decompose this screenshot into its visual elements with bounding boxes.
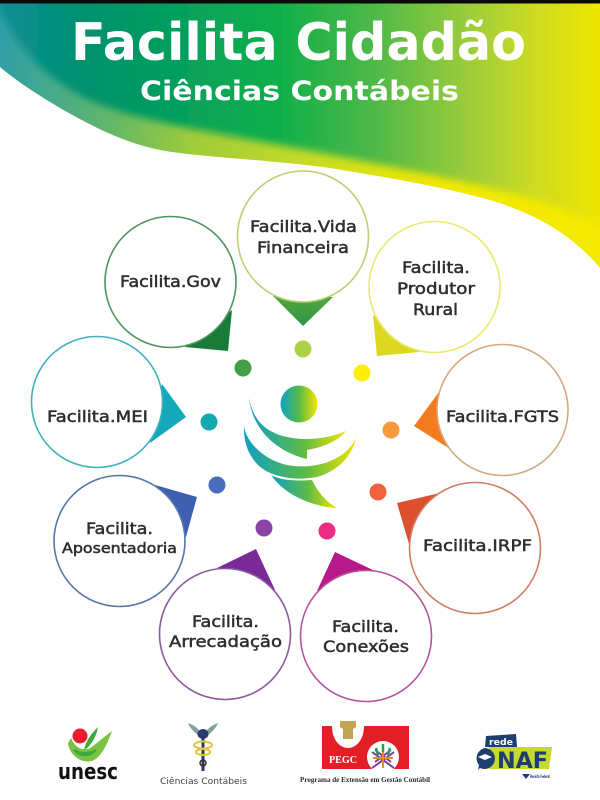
title: Facilita Cidadão [71,13,526,73]
logo: PEGC: PEGC [329,755,357,766]
logo: PEGC [300,721,430,784]
subtitle: Ciências Contábeis [140,76,459,107]
logo: rede ONAF: Receita Federal [530,774,550,779]
logo: PEGC: Programa de Extensão em Gestão Contábil [300,775,430,784]
bubble: Facilita.Vida Financeira: Facilita.Vida [250,217,357,236]
bubble: Facilita.Aposentadoria: Aposentadoria [62,541,177,557]
bubble: Facilita.FGTS: Facilita.FGTS [446,407,559,426]
bubble: Facilita.Aposentadoria [54,476,197,606]
bubble: Facilita.Produtor Rural [369,222,500,356]
ring of coloured dots [200,340,400,540]
logo: rede ONAF: NAF [497,749,548,774]
bubble: Facilita.Produtor Rural: Produtor [397,279,475,298]
logo: Ciências Contábeis caduceus [160,723,247,787]
logo: Ciências Contábeis caduceus: Ciências Contábeis [160,776,247,787]
bubble: Facilita.Aposentadoria: Facilita. [86,519,153,538]
bubble: Facilita.MEI: Facilita.MEI [47,407,148,426]
bubble: Facilita.Arrecadação: Facilita. [192,612,259,631]
bubble: Facilita.FGTS [414,344,568,476]
bubble: Facilita.Conexões [300,552,432,702]
logo: rede ONAF: rede [489,738,513,748]
bubble: Facilita.IRPF: Facilita.IRPF [423,536,532,555]
bubble: Facilita.Arrecadação [160,549,290,700]
header wave banner [0,0,600,268]
bubble: Facilita.Gov [105,216,236,351]
central logo figure [244,386,356,508]
bubble: Facilita.Produtor Rural: Rural [413,300,458,319]
bubble: Facilita.Conexões: Conexões [323,637,409,656]
bubble: Facilita.IRPF [397,482,540,614]
logo: unesc: unesc [58,760,118,785]
logo: unesc [58,727,118,785]
bubble: Facilita.Gov: Facilita.Gov [120,272,221,291]
bubble: Facilita.Vida Financeira [238,171,368,326]
bubble: Facilita.Vida Financeira: Financeira [257,238,349,257]
bubble: Facilita.Conexões: Facilita. [332,617,399,636]
bubble: Facilita.Arrecadação: Arrecadação [169,632,282,651]
bubble: Facilita.MEI [32,336,186,468]
bubble: Facilita.Produtor Rural: Facilita. [402,258,470,277]
logo: rede ONAF [477,734,552,779]
